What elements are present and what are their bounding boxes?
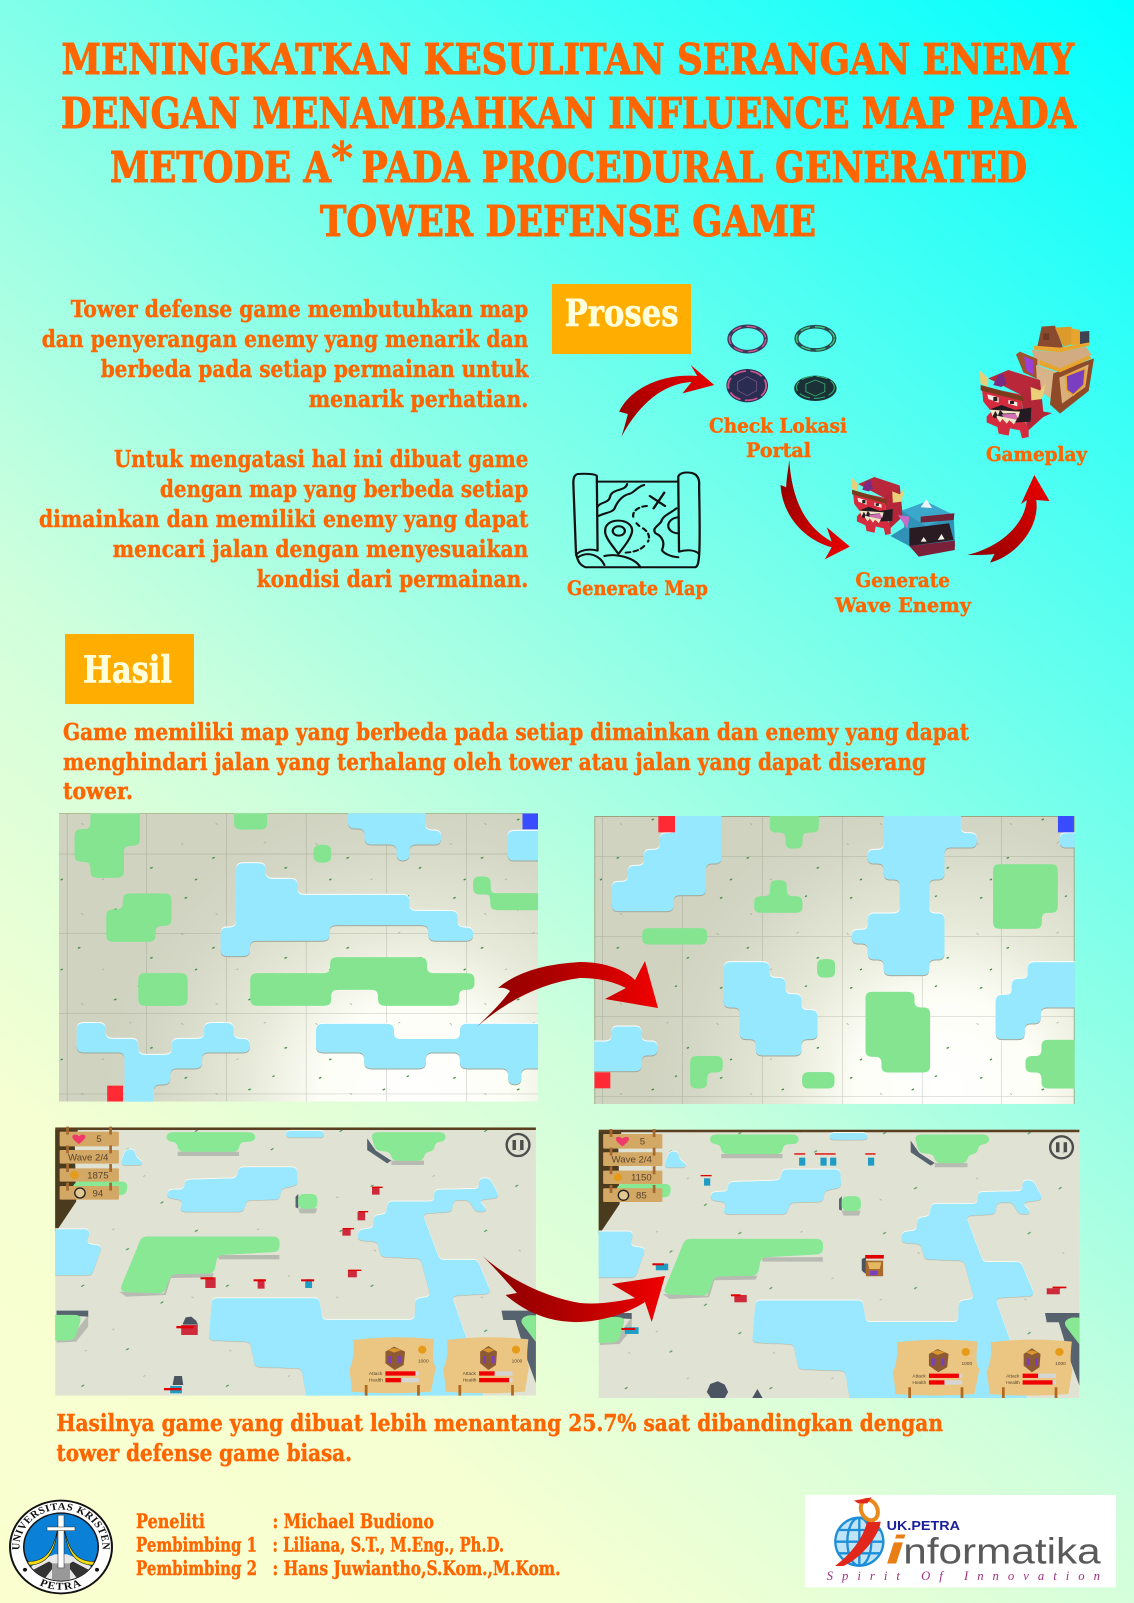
gameplay screenshot 1	[47, 1127, 550, 1410]
credits: : Liliana, S.T., M.Eng., Ph.D.	[272, 1532, 504, 1556]
credits: : Hans Juwiantho,S.Kom.,M.Kom.	[272, 1556, 560, 1580]
logo: informatika: Spirit Of Innovation	[827, 1569, 1100, 1583]
icon: gameplay tower and monster	[979, 326, 1094, 438]
text block: latar belakang: Tower defense game membutuhkan map	[71, 296, 528, 323]
gameplay screenshot 2	[590, 1129, 1093, 1412]
text block: latar belakang: berbeda pada setiap permainan untuk	[101, 356, 529, 383]
text block: latar belakang: dengan map yang berbeda setiap	[160, 476, 528, 503]
arrow: enemy to gameplay	[967, 475, 1049, 563]
tower placed	[862, 1255, 884, 1276]
hud: status signs	[60, 1127, 119, 1200]
hud: status signs: 85	[636, 1191, 647, 1202]
label: check lokasi portal	[709, 414, 847, 462]
logo: informatika: UK.PETRA	[887, 1519, 960, 1533]
text block: latar belakang: dan penyerangan enemy yang menarik dan	[42, 326, 529, 353]
arrow: gameplay 1 to gameplay 2	[482, 1256, 665, 1322]
text block: latar belakang	[39, 296, 529, 593]
tower cards: Health	[463, 1378, 477, 1384]
tower cards: 1000	[512, 1359, 523, 1365]
text block: hasil description	[63, 719, 969, 805]
arrow: map to portal	[619, 365, 714, 437]
title: *	[331, 133, 353, 184]
tower cards: 1000	[961, 1361, 973, 1367]
tower cards	[349, 1337, 529, 1396]
hud: status signs: 5	[640, 1136, 645, 1147]
title	[61, 35, 1077, 247]
tower cards: Attack	[463, 1371, 477, 1377]
title: TOWER DEFENSE GAME	[320, 197, 816, 247]
icon: treasure map	[573, 472, 700, 567]
tower cards: Attack	[1006, 1373, 1020, 1379]
map screenshot 2	[594, 816, 1075, 1104]
text block: latar belakang: mencari jalan dengan menyesuaikan	[113, 536, 529, 563]
credits: Pembimbing 2	[136, 1556, 257, 1580]
credits: Peneliti	[136, 1509, 205, 1533]
icon: globe	[835, 1518, 883, 1566]
map screenshot 1	[59, 813, 538, 1102]
text block: latar belakang: kondisi dari permainan.	[257, 566, 528, 593]
logo: informatika: nformatika	[903, 1530, 1102, 1571]
heading: hasil	[65, 634, 194, 704]
tower cards: Attack	[369, 1371, 383, 1377]
label: generate wave enemy: Generate	[856, 568, 950, 592]
credits: Pembimbing 1	[136, 1532, 257, 1556]
icon: portals	[726, 326, 837, 402]
text block: latar belakang: menarik perhatian.	[309, 386, 528, 413]
label: gameplay: Gameplay	[986, 442, 1088, 466]
credits	[136, 1509, 560, 1580]
label: generate wave enemy	[834, 568, 972, 617]
enemies wave 1	[164, 1187, 383, 1393]
text block: latar belakang: dimainkan dan memiliki enemy yang dapat	[39, 506, 529, 533]
logo: informatika: i	[886, 1528, 906, 1572]
text block: kesimpulan: tower defense game biasa.	[56, 1440, 352, 1467]
label: generate wave enemy: Wave Enemy	[834, 593, 972, 617]
tower cards: Attack	[912, 1373, 926, 1379]
hud: status signs: 5	[96, 1134, 102, 1145]
tower cards: Health	[369, 1378, 383, 1384]
hud: status signs: Wave 2/4	[68, 1152, 108, 1163]
heading: proses: Proses	[565, 291, 679, 335]
logo: universitas kristen petra	[9, 1500, 113, 1594]
text block: hasil description: tower.	[63, 778, 133, 805]
tower cards: 1000	[1055, 1361, 1066, 1367]
hud: status signs: 1150	[631, 1173, 652, 1184]
title: METODE A	[110, 143, 332, 193]
hud: status signs: 1875	[87, 1170, 109, 1181]
tower cards	[893, 1340, 1073, 1398]
tower cards: Health	[912, 1380, 927, 1386]
text block: kesimpulan: Hasilnya game yang dibuat lebih menantang 25.7% saat dibandingkan dengan	[56, 1410, 943, 1437]
hud: status signs: Wave 2/4	[612, 1155, 652, 1166]
hud: status signs	[603, 1129, 662, 1202]
text block: kesimpulan	[56, 1410, 943, 1467]
tower cards: Health	[1006, 1380, 1020, 1386]
text block: latar belakang: Untuk mengatasi hal ini dibuat game	[114, 446, 528, 473]
arrow: map 1 to map 2	[477, 961, 658, 1027]
panel: process diagram	[567, 326, 1094, 617]
enemies wave 2	[621, 1153, 1066, 1398]
label: generate map: Generate Map	[567, 576, 708, 600]
icon: enemy wave	[851, 477, 955, 557]
hud: status signs: 94	[93, 1188, 103, 1199]
logo: informatika	[805, 1495, 1116, 1587]
logo: universitas kristen petra: UNIVERSITAS KRISTEN	[12, 1503, 110, 1550]
logo: universitas kristen petra: PETRA	[40, 1578, 82, 1590]
tower cards: 1000	[418, 1359, 429, 1365]
arrow: portal to enemy	[781, 460, 850, 559]
credits: : Michael Budiono	[272, 1509, 434, 1533]
text block: hasil description: Game memiliki map yang berbeda pada setiap dimainkan dan enemy yang dapat	[63, 719, 969, 746]
label: check lokasi portal: Check Lokasi	[709, 414, 847, 438]
text block: hasil description: menghindari jalan yang terhalang oleh tower atau jalan yang dapat diserang	[63, 749, 926, 776]
heading: hasil: Hasil	[83, 648, 172, 692]
icon: graduate swoosh	[835, 1497, 881, 1566]
heading: proses	[552, 284, 691, 354]
icon: pause button	[1050, 1136, 1073, 1158]
icon: pause button	[507, 1134, 529, 1156]
label: check lokasi portal: Portal	[746, 438, 811, 462]
